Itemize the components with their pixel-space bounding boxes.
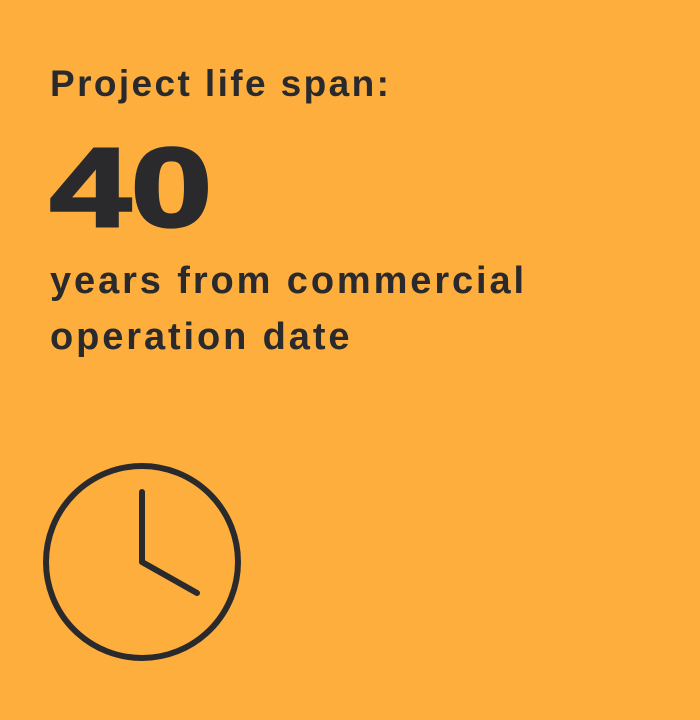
icon: clock (43, 463, 241, 661)
description (50, 260, 527, 358)
description: years from commercial (50, 260, 527, 302)
big number: 40 (50, 125, 212, 250)
description: operation date (50, 316, 352, 358)
heading: Project life span: (50, 63, 391, 104)
